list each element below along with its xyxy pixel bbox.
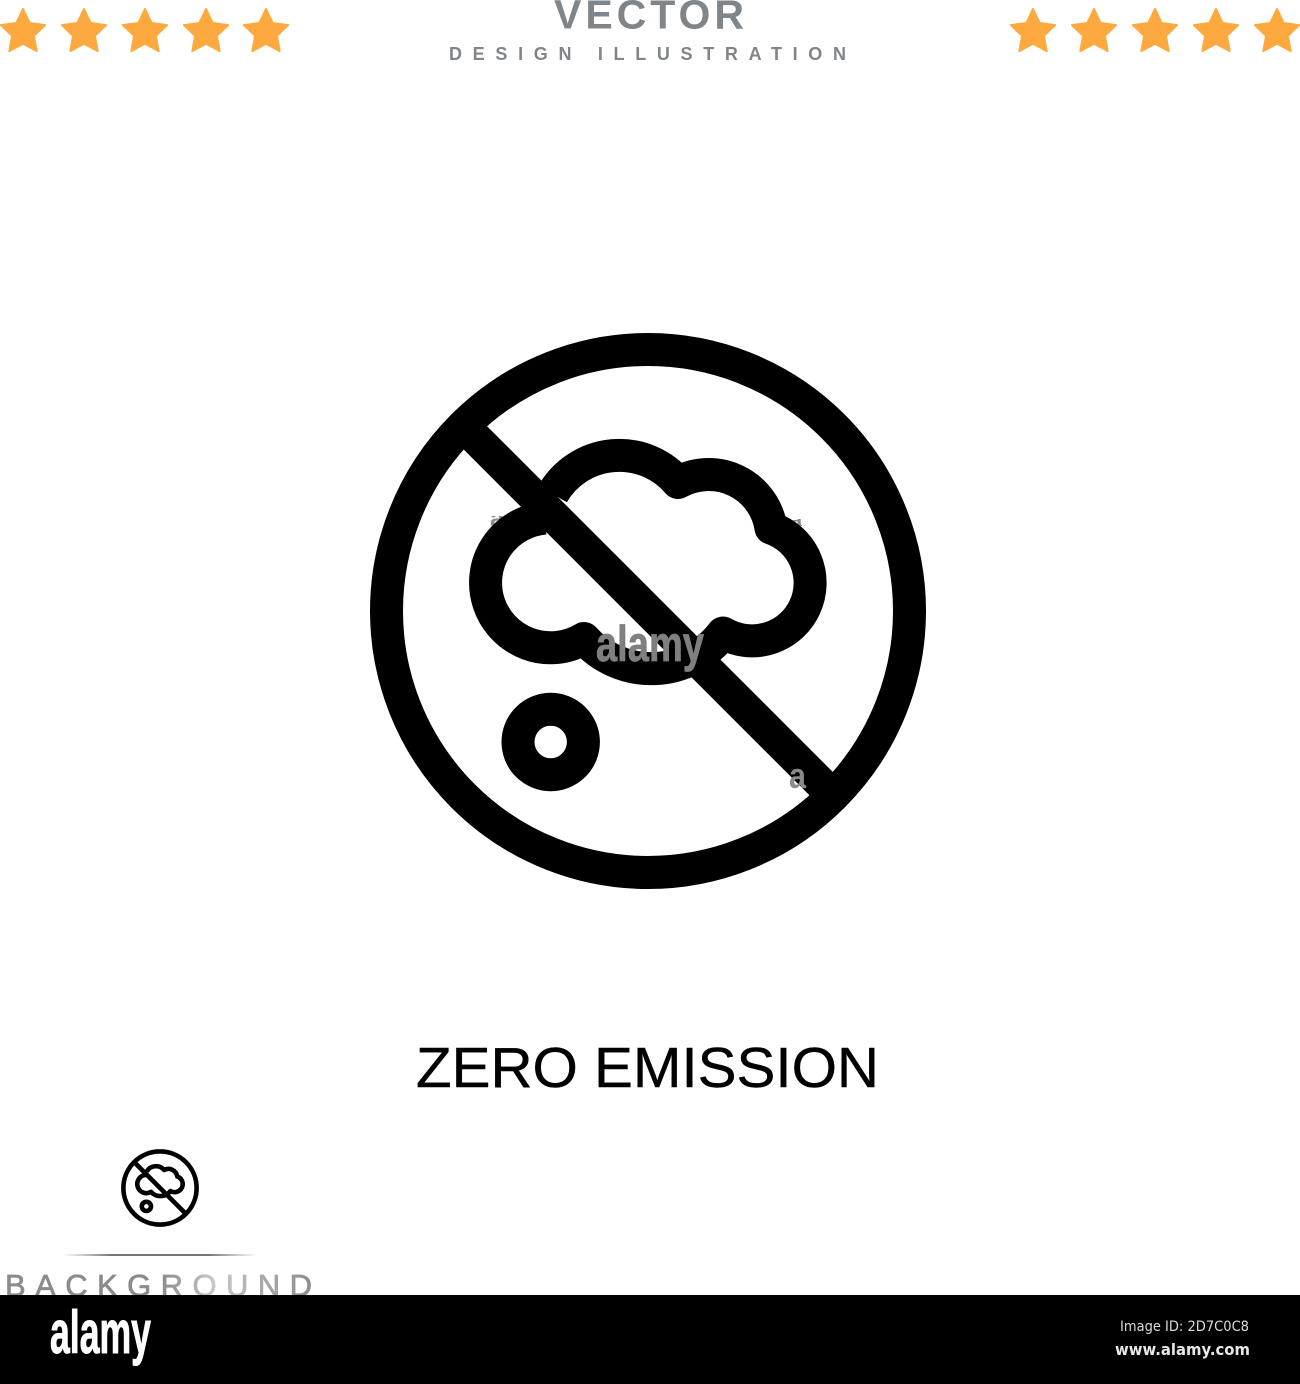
watermark: letter fragment right of cloud: a (790, 507, 803, 532)
icon: zero emission small (123, 1151, 197, 1225)
icon part: particle dot (518, 709, 583, 775)
watermark: letter fragment left of cloud: a (490, 503, 505, 533)
title: ZERO EMISSION: ZERO EMISSION (416, 1036, 879, 1100)
subheading: DESIGN ILLUSTRATION: DESIGN ILLUSTRATION (449, 44, 846, 64)
icon part: diagonal bar (470, 432, 827, 790)
website: www.alamy.com (1115, 1340, 1250, 1359)
footer background (0, 1295, 1300, 1384)
divider rule (62, 1254, 258, 1256)
label: BACKGROUND: BACKGROUND (5, 1268, 312, 1303)
image id: Image ID: 2D7C0C8 (1120, 1319, 1249, 1335)
icon: zero emission main (386, 350, 910, 872)
icon part: cloud (486, 455, 810, 669)
watermark: letter a lower right: a (789, 755, 807, 796)
icon part: prohibition ring (386, 350, 910, 872)
watermark: alamy centre: alamy (596, 616, 704, 672)
logo: alamy: alamy (50, 1299, 151, 1366)
star rating: right (1011, 9, 1299, 51)
star rating: left (1, 9, 288, 51)
footer bar (0, 1295, 1300, 1384)
